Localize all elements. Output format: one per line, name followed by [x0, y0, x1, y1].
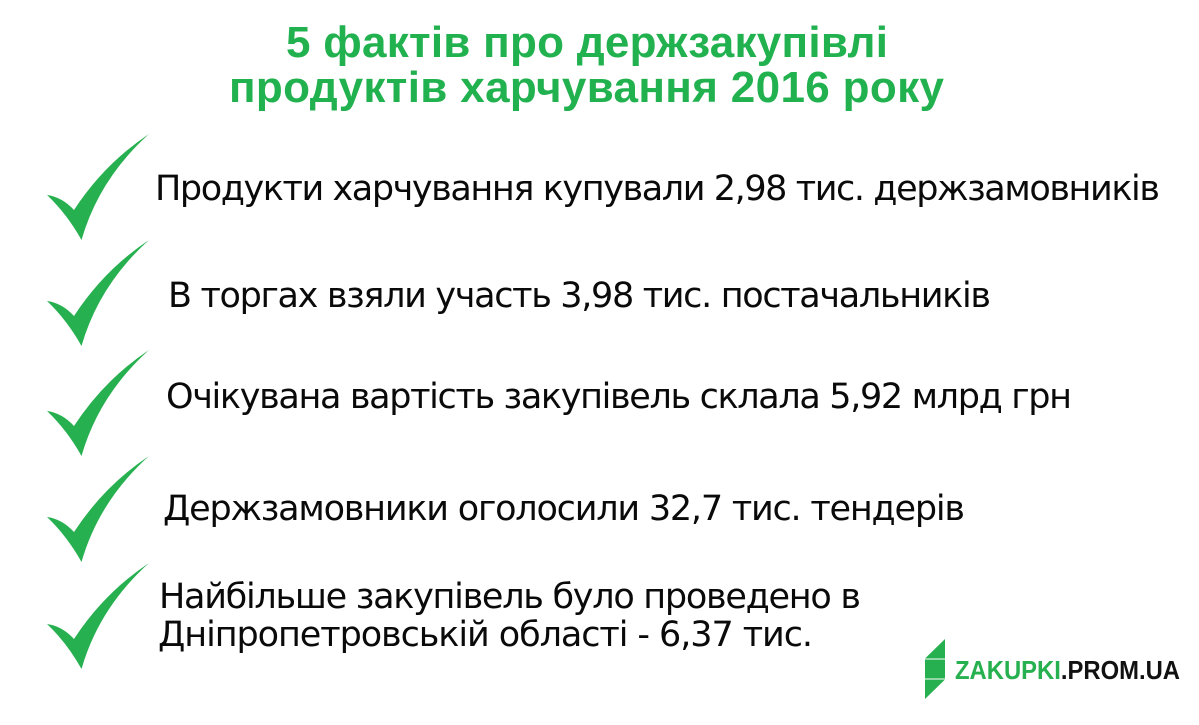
logo text: ZAKUPKI.PROM.UA [955, 655, 1180, 685]
fact 1: Продукти харчування купували 2,98 тис. держзамовників [155, 169, 1160, 209]
fact 2: В торгах взяли участь 3,98 тис. постачальників [168, 276, 991, 316]
title [229, 18, 945, 112]
icon: check mark 4 [47, 456, 149, 562]
fact 5 [158, 577, 861, 655]
fact 5: Найбільше закупівель було проведено в [159, 577, 861, 617]
icon: check mark 3 [47, 350, 149, 456]
fact 5: Дніпропетровській області - 6,37 тис. [158, 615, 813, 655]
icon: check mark 5 [47, 563, 149, 669]
title: продуктів харчування 2016 року [229, 63, 945, 112]
title: 5 фактів про держзакупівлі [286, 18, 888, 67]
logo: zakupki.prom.ua [925, 639, 1180, 699]
fact 4: Держзамовники оголосили 32,7 тис. тендерів [163, 489, 965, 529]
icon: check mark 2 [47, 240, 149, 346]
fact 3: Очікувана вартість закупівель склала 5,92 млрд грн [166, 377, 1072, 417]
icon: check mark 1 [47, 134, 149, 240]
logo mark [925, 639, 945, 699]
